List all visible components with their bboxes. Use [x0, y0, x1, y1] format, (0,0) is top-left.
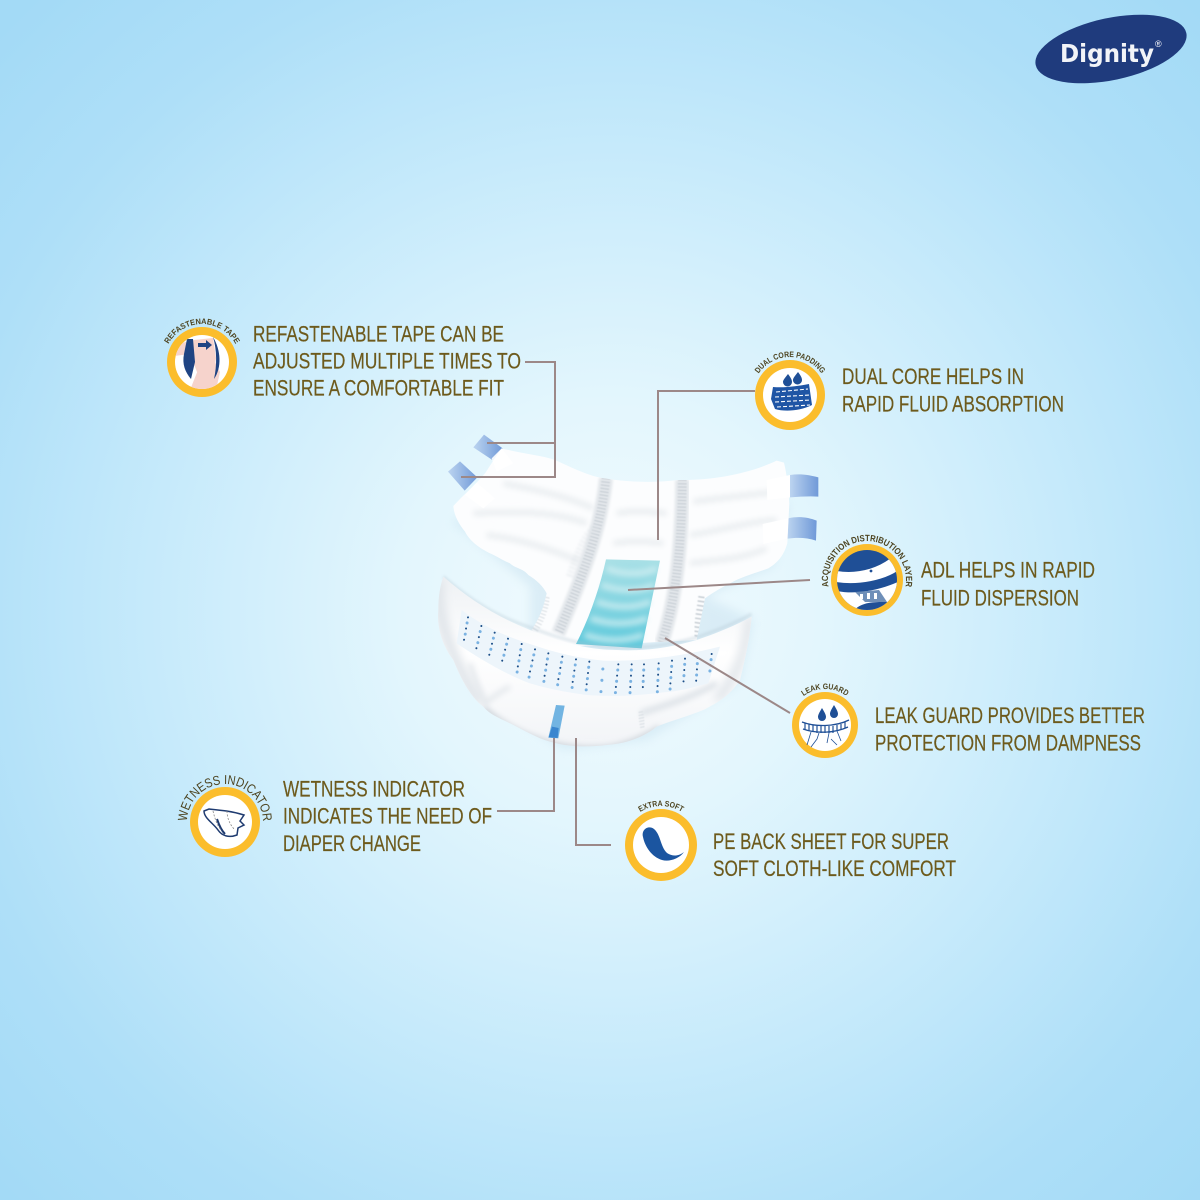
icon: leak guard: LEAK GUARD	[800, 684, 848, 696]
text: wetness indicator: WETNESS INDICATOR	[283, 776, 465, 802]
feature: ADL	[822, 534, 1095, 616]
icon: wetness indicator	[178, 775, 272, 857]
text: dual core: DUAL CORE HELPS IN	[842, 364, 1024, 389]
text: extra soft	[713, 829, 956, 881]
icon: dual core padding: DUAL CORE PADDING	[754, 352, 825, 374]
leg elastic gathers	[530, 478, 703, 643]
wetness indicator strip	[548, 705, 565, 738]
diaper illustration	[438, 435, 818, 750]
text: refastenable tape: ADJUSTED MULTIPLE TIMES TO	[253, 348, 521, 374]
text: wetness indicator: INDICATES THE NEED OF	[283, 804, 492, 828]
logo: Dignity: Dignity	[1060, 39, 1154, 68]
blue dots on waistband	[464, 617, 712, 695]
text: refastenable tape: REFASTENABLE TAPE CAN BE	[253, 322, 504, 346]
icon: wetness indicator: WETNESS INDICATOR	[178, 775, 272, 821]
back panel of diaper	[453, 448, 790, 647]
tape tabs	[448, 435, 818, 541]
feature: leak guard	[792, 684, 1145, 758]
waistband top edge shadow	[443, 577, 752, 648]
feature: wetness indicator	[178, 775, 492, 857]
icon: refastenable tape	[164, 318, 240, 397]
blue absorbent core	[576, 559, 660, 648]
icon: refastenable tape: REFASTENABLE TAPE	[164, 318, 240, 344]
icon: extra soft: EXTRA SOFT	[638, 800, 684, 812]
waist tape pads	[465, 483, 495, 508]
text: wetness indicator	[283, 776, 492, 856]
text: extra soft: PE BACK SHEET FOR SUPER	[713, 829, 949, 854]
text: extra soft: SOFT CLOTH-LIKE COMFORT	[713, 856, 956, 881]
logo: Dignity	[1029, 3, 1193, 95]
feature: extra soft	[625, 800, 956, 881]
text: ADL	[921, 558, 1095, 610]
text: leak guard	[875, 703, 1145, 756]
leader lines	[461, 362, 810, 845]
text: refastenable tape	[253, 322, 521, 400]
icon: leak guard	[792, 684, 858, 758]
icon: extra soft	[625, 800, 697, 881]
text: dual core	[842, 364, 1064, 416]
icon: dual core padding	[754, 352, 825, 430]
diaper shadow	[450, 503, 790, 750]
icon: acquisition distribution layer: ACQUISITION DISTRIBUTION LAYER	[822, 534, 912, 587]
text: refastenable tape: ENSURE A COMFORTABLE FIT	[253, 376, 504, 400]
text: wetness indicator: DIAPER CHANGE	[283, 831, 421, 856]
text: ADL: FLUID DISPERSION	[921, 586, 1079, 610]
text: ADL: ADL HELPS IN RAPID	[921, 558, 1095, 582]
text: dual core: RAPID FLUID ABSORPTION	[842, 392, 1064, 416]
icon: acquisition distribution layer	[822, 534, 912, 616]
front waistband	[438, 577, 752, 749]
feature: refastenable tape	[164, 318, 521, 400]
logo: Dignity: ®	[1155, 39, 1162, 49]
feature: dual core	[754, 352, 1064, 430]
